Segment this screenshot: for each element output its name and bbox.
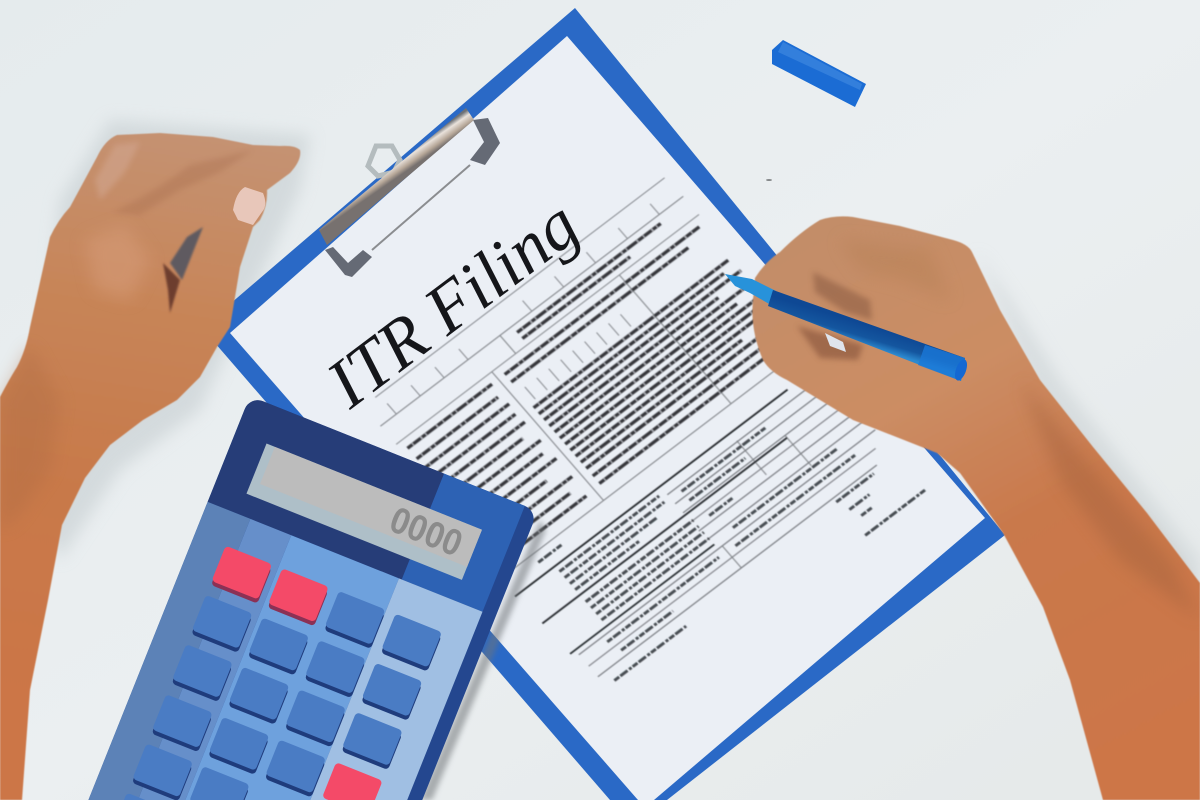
paper sheet — [230, 36, 985, 800]
spring clip — [319, 108, 500, 277]
form dense text rows — [390, 205, 798, 559]
right arm and hand — [752, 216, 1200, 800]
keypad — [111, 546, 443, 800]
hand highlight — [85, 225, 150, 300]
shadow left hand — [30, 120, 310, 560]
form grid lines — [363, 177, 901, 677]
pen cap — [772, 40, 866, 107]
right hand — [752, 216, 1200, 800]
left hand — [0, 133, 300, 800]
printed tax form — [355, 177, 933, 720]
left hand dorsal shading — [0, 345, 60, 530]
speck on desk — [766, 179, 772, 181]
hand shading between fingers — [813, 272, 872, 320]
calculator body — [72, 396, 538, 800]
blue pen — [725, 274, 969, 382]
form text underlay — [390, 205, 798, 559]
hand highlight — [840, 240, 950, 300]
finger gap — [163, 227, 203, 313]
calculator shadow — [420, 520, 546, 800]
thumb nail — [233, 187, 265, 225]
display — [246, 444, 482, 580]
forearm dark band — [1020, 380, 1200, 620]
thumb web shading — [797, 326, 863, 360]
display digits: 0000 — [384, 499, 468, 564]
form field ticks — [387, 204, 707, 469]
clipboard blue board — [202, 8, 1005, 800]
form lower rows — [530, 369, 901, 677]
clipboard — [202, 8, 1005, 800]
paper gap between fingers — [825, 333, 846, 352]
finger fold — [113, 150, 253, 215]
knuckle highlight — [95, 142, 140, 200]
heading: ITR Filing: ITR Filing — [312, 186, 593, 423]
header navy — [208, 396, 444, 579]
shadow right arm — [975, 250, 1200, 620]
calculator — [72, 396, 546, 800]
left arm and palm — [0, 133, 300, 800]
form lower text — [522, 356, 926, 708]
header blue — [402, 474, 525, 612]
key panel stripes — [72, 502, 482, 800]
form dark rules — [515, 390, 839, 656]
